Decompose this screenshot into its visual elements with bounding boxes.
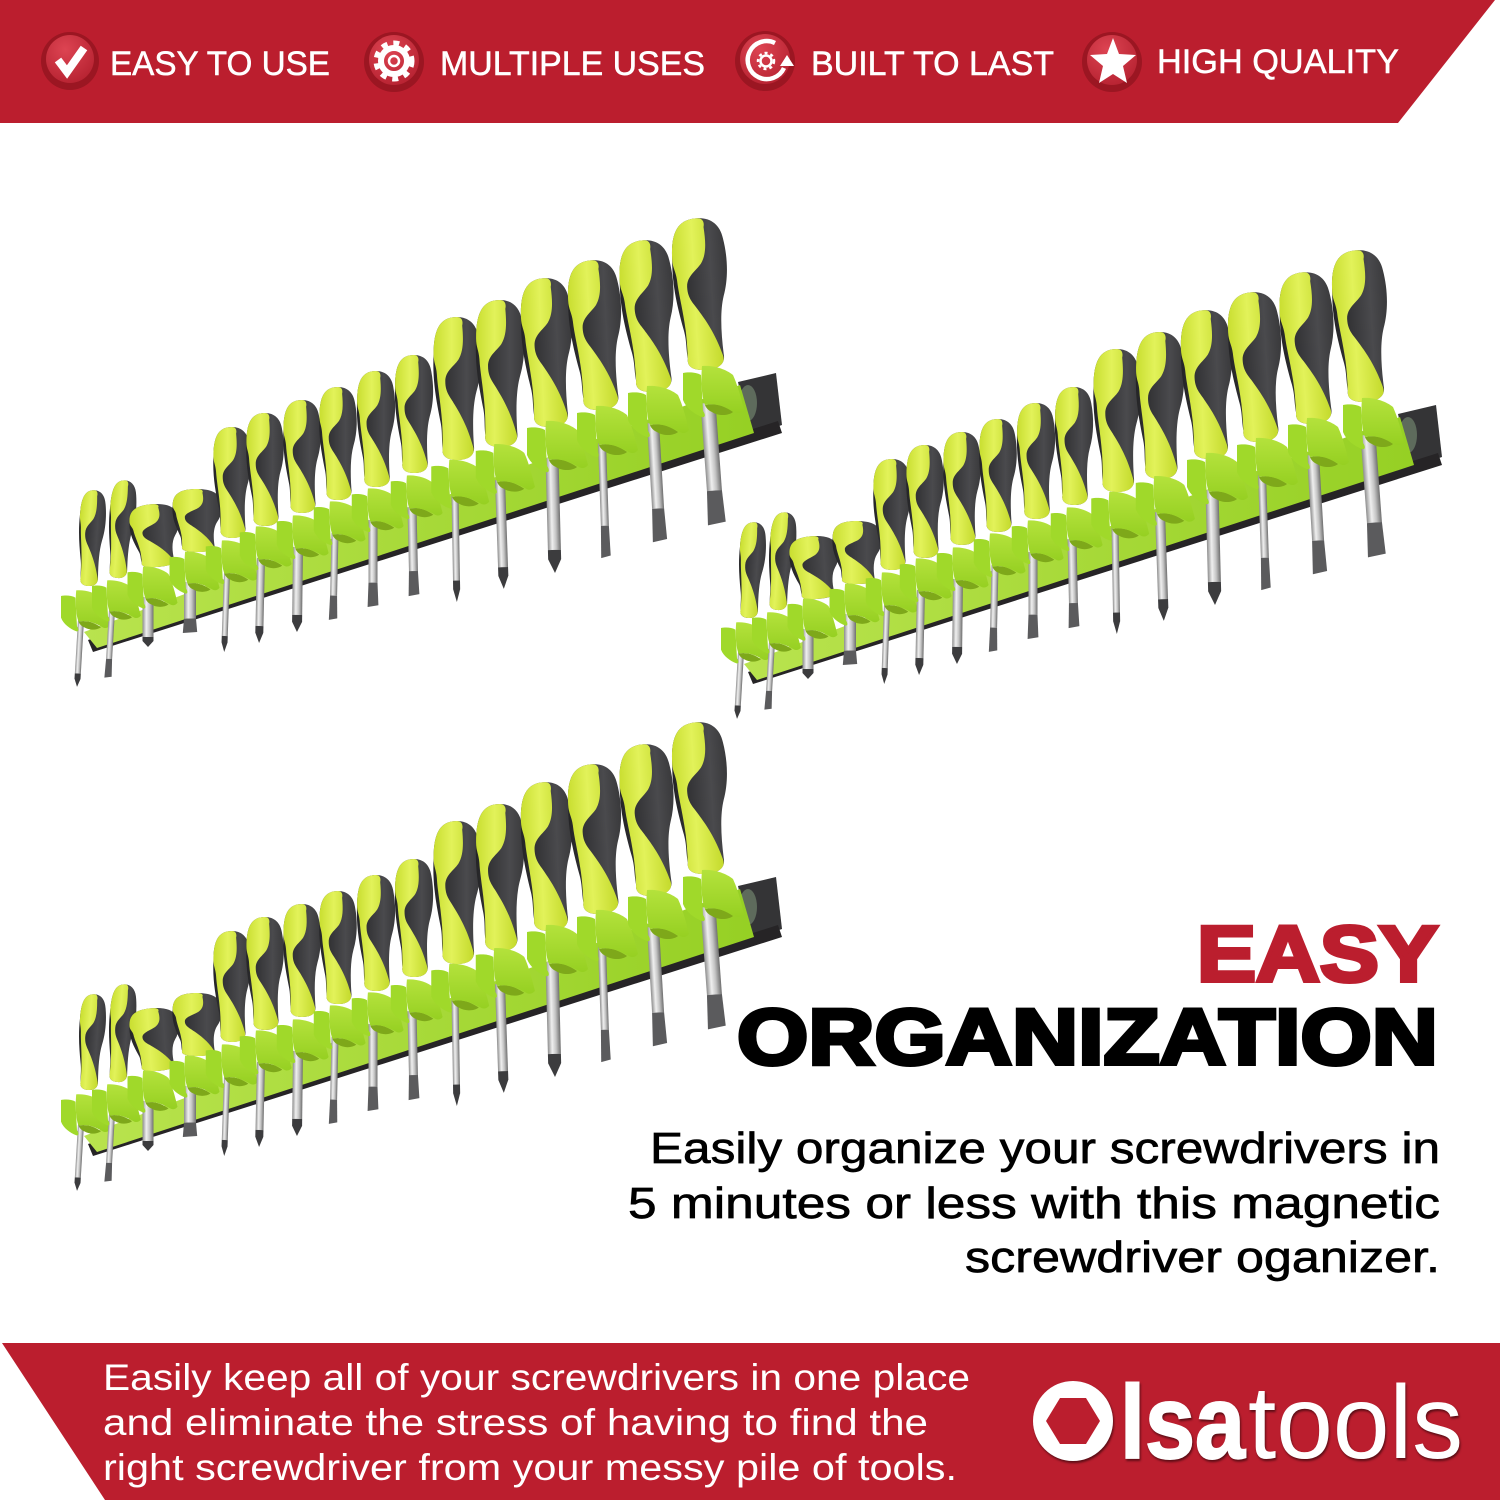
- magnetic bar: [88, 421, 782, 652]
- screwdriver 16: [670, 217, 744, 525]
- icon: check mark: [41, 32, 99, 90]
- screwdriver 14: [566, 259, 638, 558]
- label: high quality: HIGH QUALITY: [1157, 43, 1399, 81]
- logo: Olsatools: [1033, 1365, 1463, 1481]
- label: built to last: BUILT TO LAST: [811, 45, 1054, 83]
- logo: Olsatools: lsa: [1120, 1365, 1246, 1481]
- magnet end cap: [738, 373, 782, 436]
- banner text: right screwdriver from your messy pile of tools.: [103, 1447, 957, 1488]
- banner text: Easily keep all of your screwdrivers in one place: [103, 1357, 970, 1398]
- green plate: [84, 385, 754, 648]
- screwdriver 4: [170, 489, 222, 633]
- screwdriver 8: [314, 387, 366, 620]
- heading: organization: ORGANIZATION: [737, 992, 1438, 1081]
- description text: 5 minutes or less with this magnetic: [628, 1179, 1440, 1228]
- description text: [628, 1124, 1440, 1282]
- screwdriver 5: [206, 427, 258, 652]
- label: easy to use: EASY TO USE: [110, 45, 330, 83]
- bottom banner: [2, 1343, 1500, 1500]
- label: multiple uses: MULTIPLE USES: [440, 45, 705, 83]
- screwdriver 9: [352, 371, 404, 607]
- screwdriver 11: [431, 317, 489, 602]
- screwdriver 15: [617, 239, 689, 542]
- logo: Olsatools: O: [1052, 1390, 1095, 1452]
- description text: screwdriver oganizer.: [965, 1233, 1440, 1282]
- screwdriver 12: [476, 300, 535, 589]
- icon: gear: [364, 32, 424, 92]
- screwdriver 6: [240, 413, 292, 643]
- logo: Olsatools: tools: [1248, 1365, 1463, 1481]
- icon: star: [1082, 32, 1142, 92]
- top banner: [0, 0, 1495, 123]
- screwdriver 2: [92, 479, 141, 678]
- banner text: [103, 1357, 970, 1488]
- icon: circular arrow with gear: [735, 31, 795, 91]
- screwdriver 1: [61, 489, 110, 687]
- description text: Easily organize your screwdrivers in: [650, 1124, 1440, 1173]
- banner text: and eliminate the stress of having to find the: [103, 1402, 928, 1443]
- screwdriver 7: [277, 400, 329, 632]
- screwdriver 13: [519, 277, 588, 573]
- screwdriver rack 2: [721, 249, 1442, 719]
- screwdriver rack 1: [61, 217, 782, 687]
- screwdriver rack 3: [61, 721, 782, 1191]
- screwdriver 10: [391, 355, 443, 596]
- heading: easy: EASY: [1197, 909, 1438, 998]
- screwdriver 3: [128, 502, 182, 647]
